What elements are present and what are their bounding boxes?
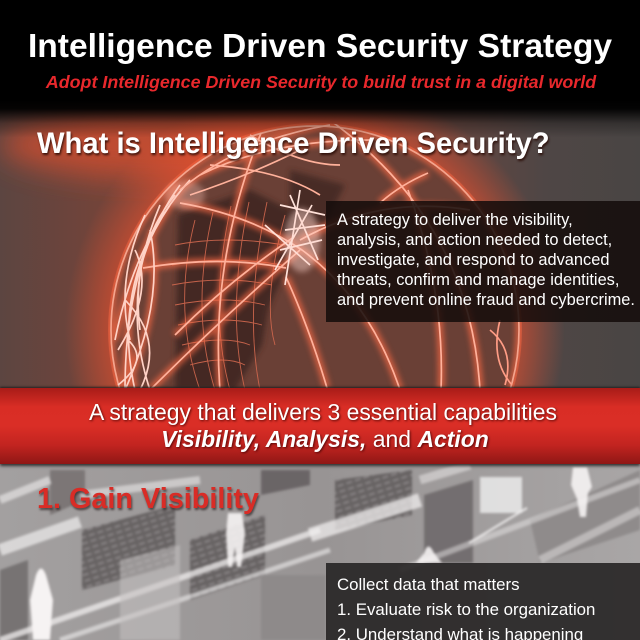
panel: globe hero background — [0, 108, 640, 388]
callout: strategy definition: threats, confirm and manage identities, — [337, 271, 619, 289]
callout: strategy definition: analysis, and action needed to detect, — [337, 231, 612, 249]
heading: gain visibility: 1. Gain Visibility — [37, 483, 259, 515]
callout: capability list — [326, 563, 640, 640]
panel: red capabilities banner — [0, 388, 640, 464]
heading: what is intelligence driven security: What is Intelligence Driven Security? — [37, 128, 550, 160]
banner line two: Visibility, Analysis, and Action — [161, 426, 489, 452]
callout: strategy definition: and prevent online fraud and cybercrime. — [337, 291, 635, 309]
callout: strategy definition — [326, 201, 640, 322]
header band — [0, 0, 640, 100]
panel: visibility background image — [0, 464, 640, 640]
callout: strategy definition: investigate, and respond to advanced — [337, 251, 609, 269]
title: Intelligence Driven Security Strategy — [28, 28, 612, 65]
silhouettes — [30, 467, 592, 640]
subtitle: Adopt Intelligence Driven Security to build trust in a digital world — [46, 72, 596, 92]
callout: strategy definition: A strategy to deliver the visibility, — [337, 211, 573, 229]
callout: capability list: Collect data that matters — [337, 575, 520, 594]
callout: capability list: 1. Evaluate risk to the organization — [337, 600, 595, 619]
globe — [108, 123, 522, 388]
banner line one: A strategy that delivers 3 essential capabilities — [89, 399, 557, 425]
